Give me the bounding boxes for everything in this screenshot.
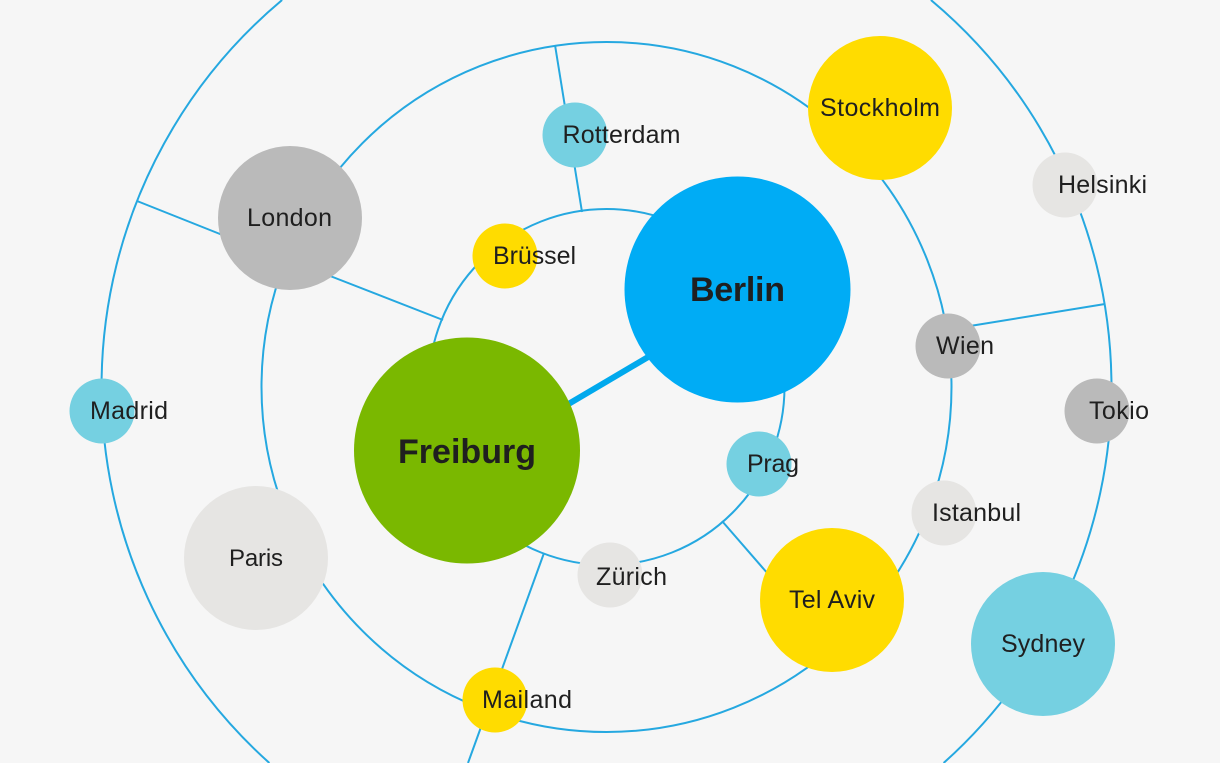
node: Berlin xyxy=(624,176,850,402)
node: Mailand xyxy=(462,668,572,732)
node: Brüssel xyxy=(472,224,576,288)
node: Berlin: Berlin xyxy=(690,271,785,309)
connection: Freiburg to Berlin xyxy=(560,350,660,409)
node: Tel Aviv: Tel Aviv xyxy=(789,586,876,614)
node: Rotterdam: Rotterdam xyxy=(562,121,680,149)
node: London: London xyxy=(247,204,332,232)
node: Freiburg: Freiburg xyxy=(398,433,536,471)
node: Brüssel: Brüssel xyxy=(493,242,576,270)
node: Wien: Wien xyxy=(936,332,994,360)
node: Tokio xyxy=(1064,378,1149,444)
node: Helsinki xyxy=(1032,152,1147,218)
node: Stockholm xyxy=(808,36,952,180)
node: Zürich: Zürich xyxy=(596,563,667,591)
node: London xyxy=(218,146,362,290)
node: Tel Aviv xyxy=(760,528,904,672)
node: Freiburg xyxy=(354,338,580,564)
node: Istanbul: Istanbul xyxy=(932,499,1021,527)
node: Tokio: Tokio xyxy=(1089,397,1149,425)
node: Prag xyxy=(726,432,799,496)
node: Sydney: Sydney xyxy=(1001,630,1086,658)
node: Wien xyxy=(916,314,994,378)
node: Helsinki: Helsinki xyxy=(1058,171,1147,199)
node: Madrid: Madrid xyxy=(90,397,168,425)
node: Rotterdam xyxy=(542,102,680,168)
node: Zürich xyxy=(578,542,667,608)
node: Paris xyxy=(184,486,328,630)
node: Mailand: Mailand xyxy=(482,686,572,714)
node: Sydney xyxy=(971,572,1115,716)
node: Paris: Paris xyxy=(229,545,283,572)
node: Stockholm: Stockholm xyxy=(820,94,940,122)
node: Madrid xyxy=(70,378,168,444)
node: Prag: Prag xyxy=(747,450,799,478)
node: Istanbul xyxy=(912,480,1021,546)
